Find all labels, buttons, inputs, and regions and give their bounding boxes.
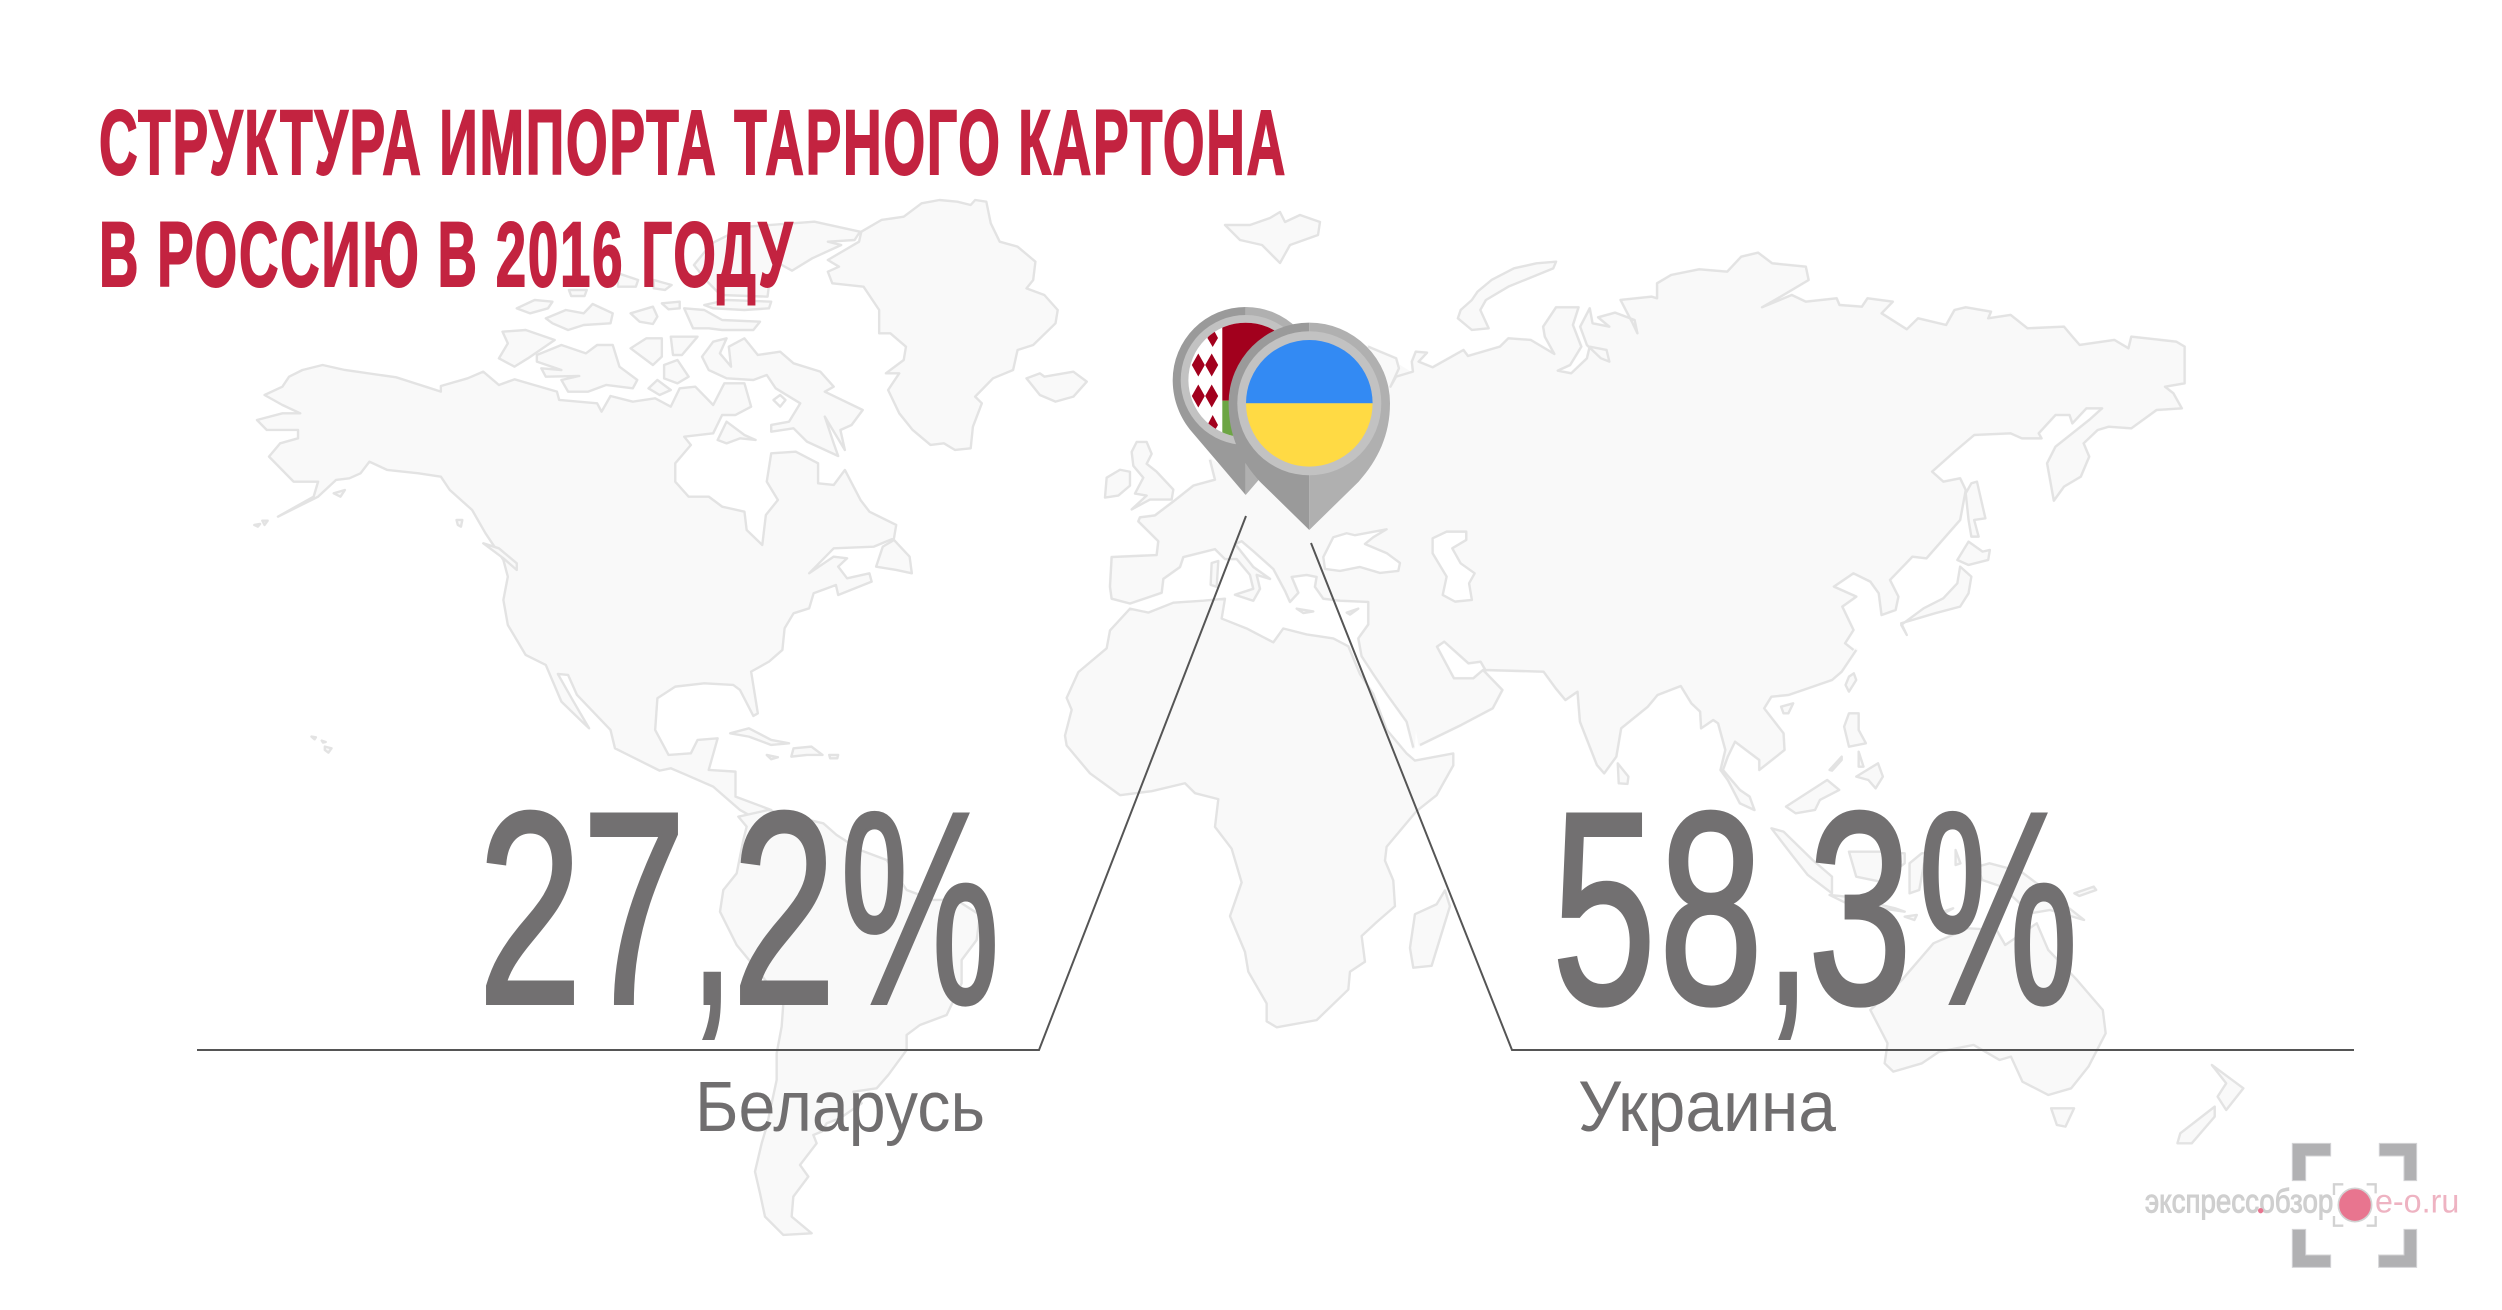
map: Madagascar [1410,890,1450,968]
title [99,92,1287,306]
value: Ukraine 58,3%: , [1766,756,1810,1062]
value: Ukraine 58,3%: 3 [1808,756,1912,1062]
map: Africa [1065,599,1453,1027]
title: В РОССИЮ В 2016 ГОДУ [99,204,794,306]
pin: Ukraine flag [1229,323,1390,530]
value: Belarus 27,2%: 2 [478,756,582,1062]
value: Belarus 27,2%: 7 [582,756,686,1062]
value: Belarus 27,2%: , [690,756,734,1062]
logo domain: e-o.ru [2375,1184,2459,1221]
map: South America [720,810,980,1235]
pin: Belarus flag [1172,307,1293,495]
map: northern and eastern Eurasia [1368,253,2185,650]
label: Belarus: Беларусь [695,1068,985,1147]
world map background [254,200,2243,1235]
map: North America [254,300,912,820]
value: Belarus 27,2% [478,756,1000,1062]
value: Ukraine 58,3%: % [1918,756,2078,1062]
watermark logo [2145,1143,2459,1267]
connector line: Belarus [197,516,1246,1050]
map: Svalbard [1225,212,1320,263]
map: Greenland and Arctic islands [569,200,1087,450]
title: СТРУКТУРА ИМПОРТА ТАРНОГО КАРТОНА [99,92,1287,194]
map: Europe, Turkey, Arabia [1065,442,1453,1027]
map: Eurasia land fill [1110,253,2185,810]
connector line: Ukraine [1311,543,2354,1050]
map: South and Southeast Asia [1420,642,2096,920]
value: Ukraine 58,3%: 5 [1552,756,1656,1062]
label: Ukraine: Украина [1578,1068,1836,1147]
logo dots [2258,1184,2376,1226]
value: Ukraine 58,3%: 8 [1659,756,1763,1062]
logo text: экспрессобзор [2145,1184,2333,1221]
value: Belarus 27,2%: 2 [732,756,836,1062]
value: Ukraine 58,3% [1552,756,2078,1062]
value: Belarus 27,2%: % [840,756,1000,1062]
map: Australia and New Zealand [1870,923,2243,1143]
logo corners [2292,1143,2417,1267]
